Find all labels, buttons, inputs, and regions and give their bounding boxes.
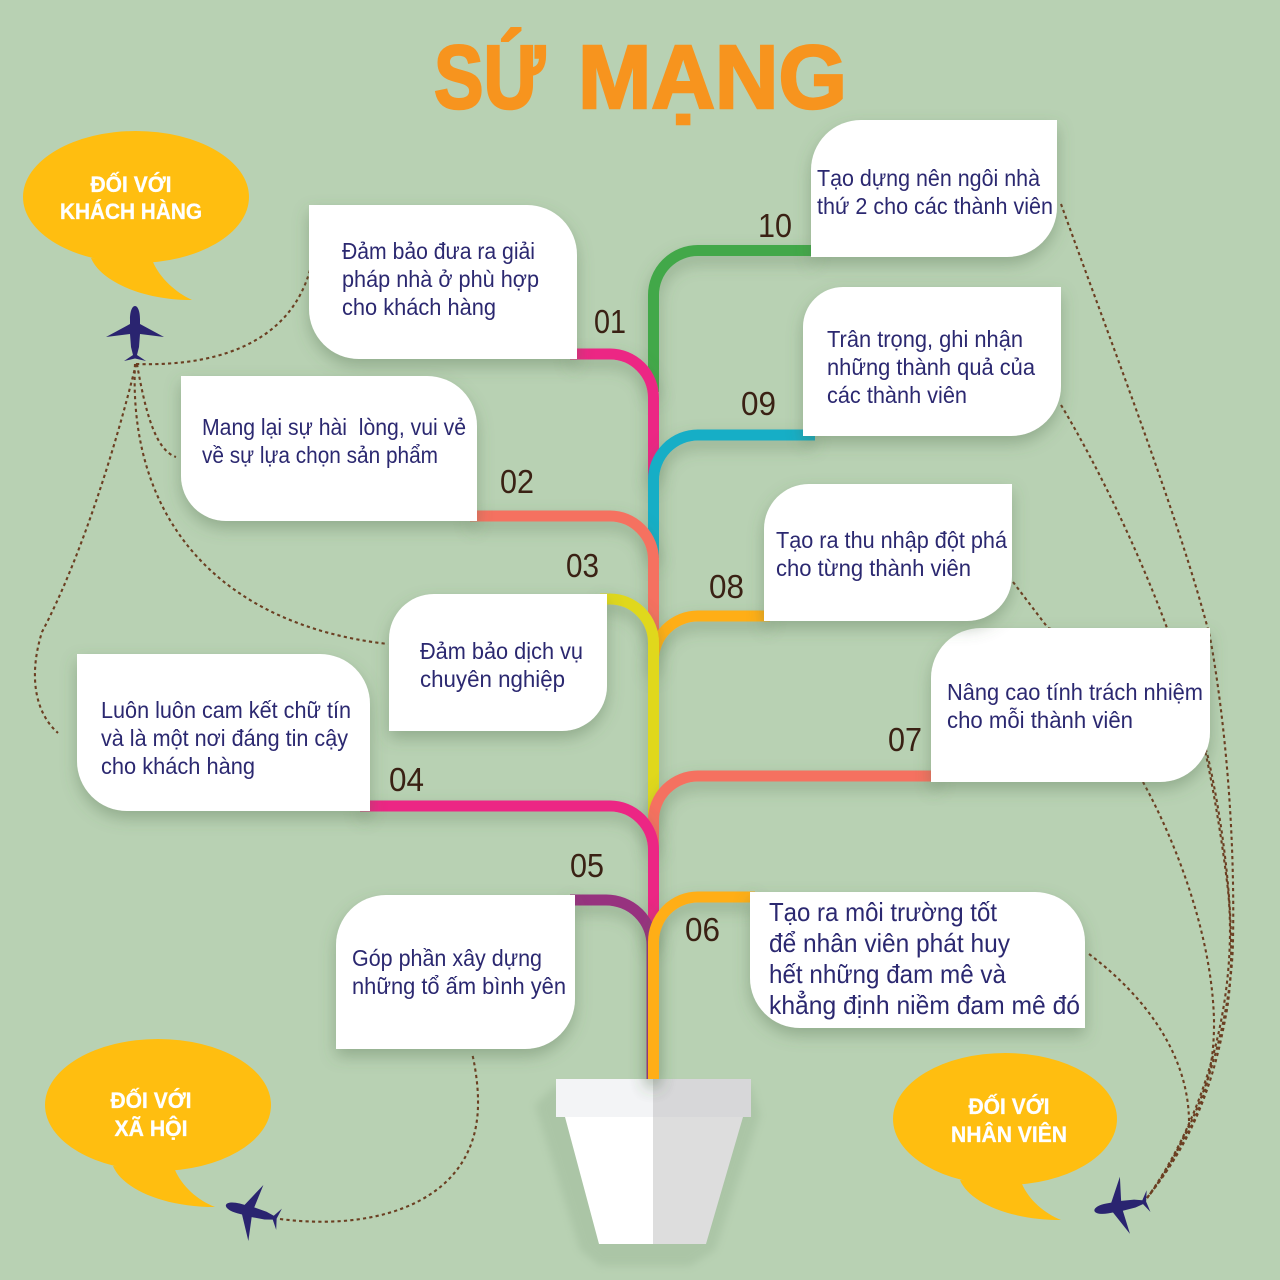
- dotted routes: employees: [1013, 204, 1233, 1198]
- text 08: Tạo ra thu nhập đột phá: [776, 527, 1007, 553]
- bubble label: customers: KHÁCH HÀNG: [60, 199, 202, 224]
- branch 02 salmon: [470, 516, 654, 640]
- number 04: 04: [389, 761, 424, 798]
- text 09: những thành quả của: [827, 354, 1035, 380]
- panel 02: [181, 376, 477, 521]
- branch 09 teal: [654, 435, 815, 558]
- icon: plane society: [218, 1177, 287, 1247]
- text 09: [827, 326, 1035, 408]
- speech bubble: employees: [893, 1053, 1117, 1220]
- title: SỨ: [434, 27, 545, 128]
- bubble label: society: XÃ HỘI: [114, 1116, 188, 1141]
- bubble label: customers: [60, 171, 202, 224]
- number 05: 05: [570, 847, 604, 884]
- panel 01: [309, 205, 577, 359]
- dotted route: society: [280, 1053, 478, 1222]
- bubble label: employees: NHÂN VIÊN: [951, 1122, 1067, 1147]
- text 09: Trân trọng, ghi nhận: [827, 326, 1023, 352]
- text 06: [769, 897, 1080, 1020]
- branch 01 pink: [570, 354, 654, 480]
- text 06: hết những đam mê và: [769, 959, 1006, 989]
- number 03: 03: [566, 547, 599, 584]
- text 10: [817, 165, 1053, 219]
- number 02: 02: [500, 463, 534, 500]
- panel 06: [750, 892, 1085, 1028]
- text 02: Mang lại sự hài lòng, vui vẻ: [202, 414, 466, 440]
- number 10: 10: [758, 207, 792, 244]
- text 08: cho từng thành viên: [776, 555, 971, 581]
- panel 09: [803, 287, 1061, 436]
- number 09: 09: [741, 385, 776, 422]
- text 07: cho mỗi thành viên: [947, 707, 1133, 733]
- text 01: [342, 238, 539, 320]
- text 04: Luôn luôn cam kết chữ tín: [101, 697, 351, 723]
- icon: plane employees: [1089, 1173, 1154, 1239]
- branch 08 orange: [654, 616, 770, 670]
- number 06: 06: [685, 911, 720, 948]
- text 05: những tổ ấm bình yên: [352, 973, 566, 999]
- branch 05 purple: [570, 900, 652, 1079]
- text 01: cho khách hàng: [342, 294, 496, 320]
- speech bubble: society: [45, 1039, 271, 1207]
- bubble label: society: [110, 1087, 192, 1141]
- text 08: [776, 527, 1007, 581]
- branch 03 yellow: [600, 599, 654, 825]
- text 04: [101, 697, 351, 779]
- number 01: 01: [594, 303, 626, 340]
- title: [434, 27, 847, 128]
- number 07: 07: [888, 721, 922, 758]
- text 03: [420, 638, 583, 692]
- bubble label: customers: ĐỐI VỚI: [90, 171, 172, 197]
- branch 10 green: [654, 250, 815, 392]
- number 08: 08: [709, 568, 744, 605]
- branch 06 orange: [654, 897, 755, 1079]
- text 09: các thành viên: [827, 382, 967, 408]
- panel 10: [811, 120, 1057, 257]
- bubble label: employees: ĐỐI VỚI: [968, 1093, 1050, 1119]
- text 01: pháp nhà ở phù hợp: [342, 266, 539, 292]
- bubble label: employees: [951, 1093, 1067, 1147]
- icon: plane customers: [106, 306, 164, 361]
- text 10: thứ 2 cho các thành viên: [817, 193, 1053, 219]
- branch 07 salmon: [654, 776, 940, 850]
- dotted routes: customers: [35, 270, 388, 733]
- text 05: [352, 945, 566, 999]
- text 02: [202, 414, 466, 468]
- text 01: Đảm bảo đưa ra giải: [342, 238, 535, 264]
- speech bubble: customers: [23, 131, 249, 300]
- text 07: Nâng cao tính trách nhiệm: [947, 679, 1203, 705]
- text 06: khẳng định niềm đam mê đó: [769, 989, 1080, 1020]
- text 05: Góp phần xây dựng: [352, 945, 542, 971]
- text 03: chuyên nghiệp: [420, 666, 565, 692]
- text 06: để nhân viên phát huy: [769, 928, 1010, 958]
- panel 08: [764, 484, 1012, 621]
- text 03: Đảm bảo dịch vụ: [420, 638, 583, 664]
- bubble label: society: ĐỐI VỚI: [110, 1087, 192, 1113]
- panel 03: [389, 594, 607, 731]
- text 04: và là một nơi đáng tin cậy: [101, 725, 348, 751]
- branch 04 pink: [360, 806, 654, 945]
- panel 04: [77, 654, 370, 811]
- panel 05: [336, 895, 575, 1049]
- flowerpot: [535, 1079, 760, 1266]
- panel 07: [931, 628, 1210, 782]
- text 07: [947, 679, 1203, 733]
- text 06: Tạo ra môi trường tốt: [769, 897, 998, 927]
- text 04: cho khách hàng: [101, 753, 255, 779]
- text 02: về sự lựa chọn sản phẩm: [202, 442, 438, 468]
- title: MẠNG: [578, 28, 847, 128]
- text 10: Tạo dựng nên ngôi nhà: [817, 165, 1040, 191]
